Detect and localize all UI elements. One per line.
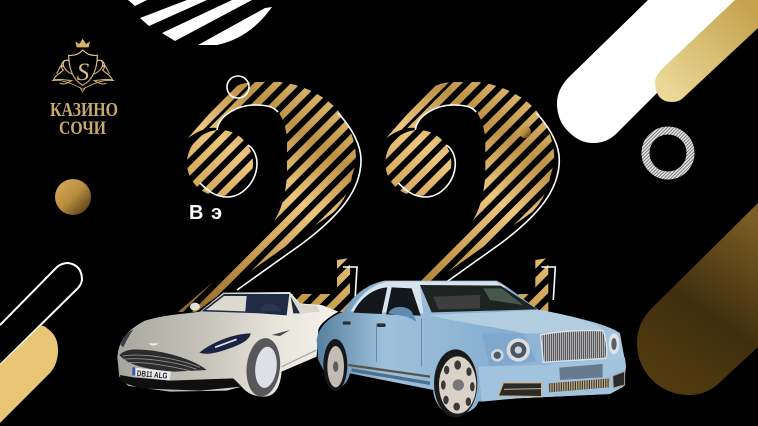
front wheel (434, 349, 477, 417)
mirror (388, 307, 417, 322)
door lines and handles (343, 318, 422, 367)
mirror (190, 303, 200, 311)
logo: СОЧИ (59, 118, 106, 139)
striped white half circle (128, 0, 272, 45)
outline (398, 105, 559, 300)
partial caption: В э (189, 202, 223, 224)
number plate (132, 367, 171, 381)
grille (119, 350, 207, 372)
intakes (548, 378, 610, 392)
number plate (559, 364, 603, 380)
wheel (244, 336, 283, 398)
crest (52, 39, 114, 92)
logo (50, 39, 118, 139)
logo text: КАЗИНО (50, 99, 118, 121)
outline (200, 76, 361, 300)
body (317, 281, 626, 415)
fender (482, 333, 537, 367)
badge (148, 343, 159, 345)
sill (348, 365, 430, 377)
numeral 2 left (178, 75, 362, 312)
hood (430, 310, 603, 333)
monogram S: S (77, 59, 90, 86)
windshield (420, 285, 537, 312)
bumper (478, 357, 626, 402)
outlined pill (0, 263, 82, 365)
rear wheel (323, 339, 347, 391)
car: silver convertible (117, 292, 338, 398)
gold dot (55, 179, 91, 215)
dark gold pill (637, 203, 758, 395)
grille (541, 330, 607, 362)
door crease (282, 350, 317, 367)
white pill (557, 0, 750, 143)
gold pill lower left (0, 326, 58, 426)
cabin (202, 294, 289, 315)
side vent (272, 330, 290, 336)
car: blue sedan (317, 281, 626, 417)
stripes (385, 82, 554, 312)
gold pill (655, 0, 758, 102)
stripes (178, 82, 356, 312)
roof (351, 281, 507, 313)
number plate: DB11 ALG (136, 368, 168, 381)
small gold dot on numeral (519, 126, 531, 138)
hatched ring (646, 130, 690, 176)
headlights (491, 334, 619, 362)
body (117, 292, 338, 397)
side windows (353, 287, 387, 314)
numeral 2 right (385, 82, 560, 312)
lower intake (120, 375, 242, 391)
headlight (199, 333, 251, 354)
